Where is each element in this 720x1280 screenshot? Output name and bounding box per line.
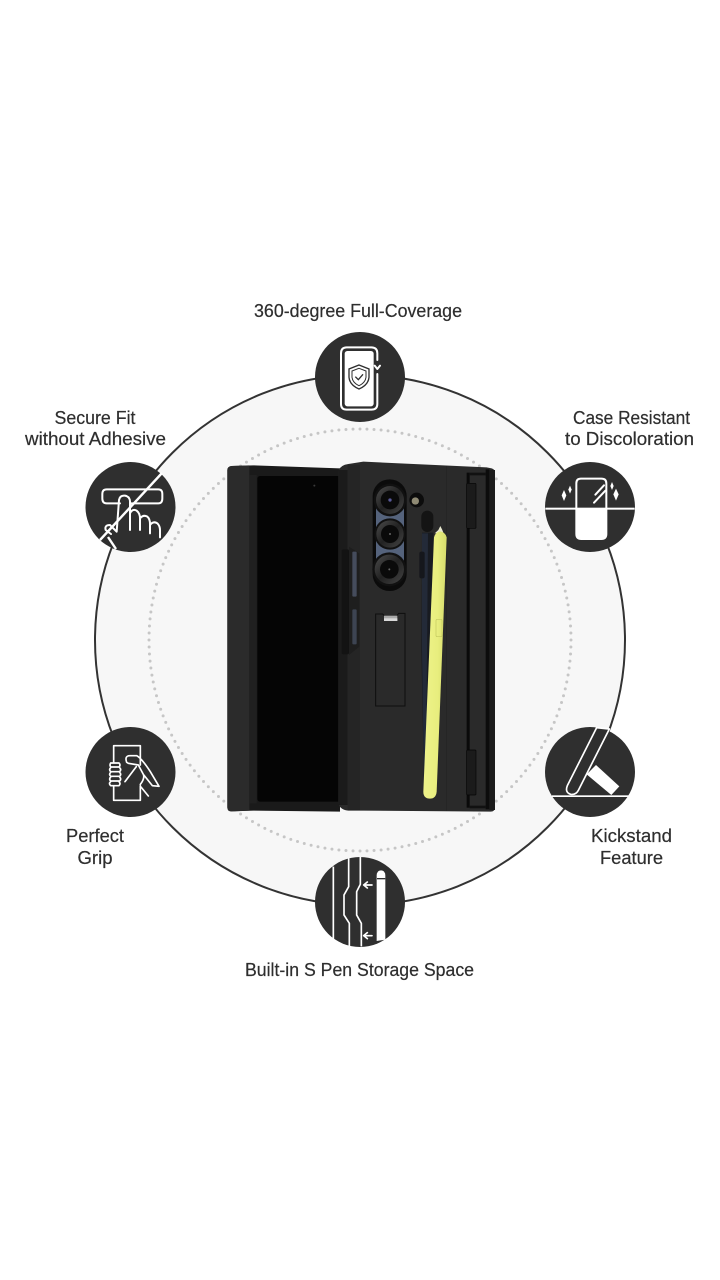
label: perfect grip	[66, 826, 124, 868]
stand and surface line	[552, 728, 629, 797]
phone outline with rotation arrow	[341, 347, 380, 410]
case cross-section lines	[333, 857, 361, 946]
label: kickstand	[591, 826, 672, 868]
S Pen shape	[377, 870, 385, 941]
icon: kickstand	[545, 727, 635, 817]
label: case resistant: Case Resistant	[573, 408, 690, 428]
yellow S Pen	[423, 526, 447, 799]
label: 360-degree: 360-degree Full-Coverage	[254, 301, 462, 321]
label: kickstand: Kickstand	[591, 826, 672, 846]
phone and hand outline	[109, 746, 159, 800]
hinge slot	[467, 469, 489, 809]
shield with check	[349, 365, 369, 389]
label: secure fit: Secure Fit	[54, 408, 136, 428]
camera module	[372, 479, 424, 591]
insertion arrows	[364, 882, 372, 939]
kickstand	[376, 613, 405, 706]
S Pen slot	[419, 511, 433, 783]
sparkles	[562, 482, 619, 501]
label: kickstand: Feature	[600, 848, 663, 868]
icon: 360-degree coverage	[315, 332, 405, 422]
dotted inner circle	[149, 429, 571, 851]
icon: secure fit hand	[86, 462, 176, 552]
white diagonal line	[100, 473, 162, 549]
icon: perfect grip	[86, 727, 176, 817]
label: secure fit	[24, 408, 166, 449]
label: secure fit: without Adhesive	[24, 429, 166, 449]
icon: S Pen storage	[315, 857, 405, 947]
label: S Pen storage: Built-in S Pen Storage Space	[245, 960, 474, 980]
icon: discoloration resistant	[545, 462, 635, 552]
label: case resistant	[565, 408, 694, 449]
right back panel	[338, 462, 495, 812]
label: perfect grip: Grip	[78, 848, 112, 868]
left cover panel	[227, 465, 345, 812]
label: case resistant: to Discoloration	[565, 429, 694, 449]
label: perfect grip: Perfect	[66, 826, 124, 846]
horizontal line and case	[545, 479, 635, 540]
product image: foldable phone in case with yellow S Pen	[227, 462, 495, 812]
side buttons	[342, 547, 359, 655]
large outlined circle	[95, 375, 625, 905]
bar and hand outline	[102, 489, 162, 537]
